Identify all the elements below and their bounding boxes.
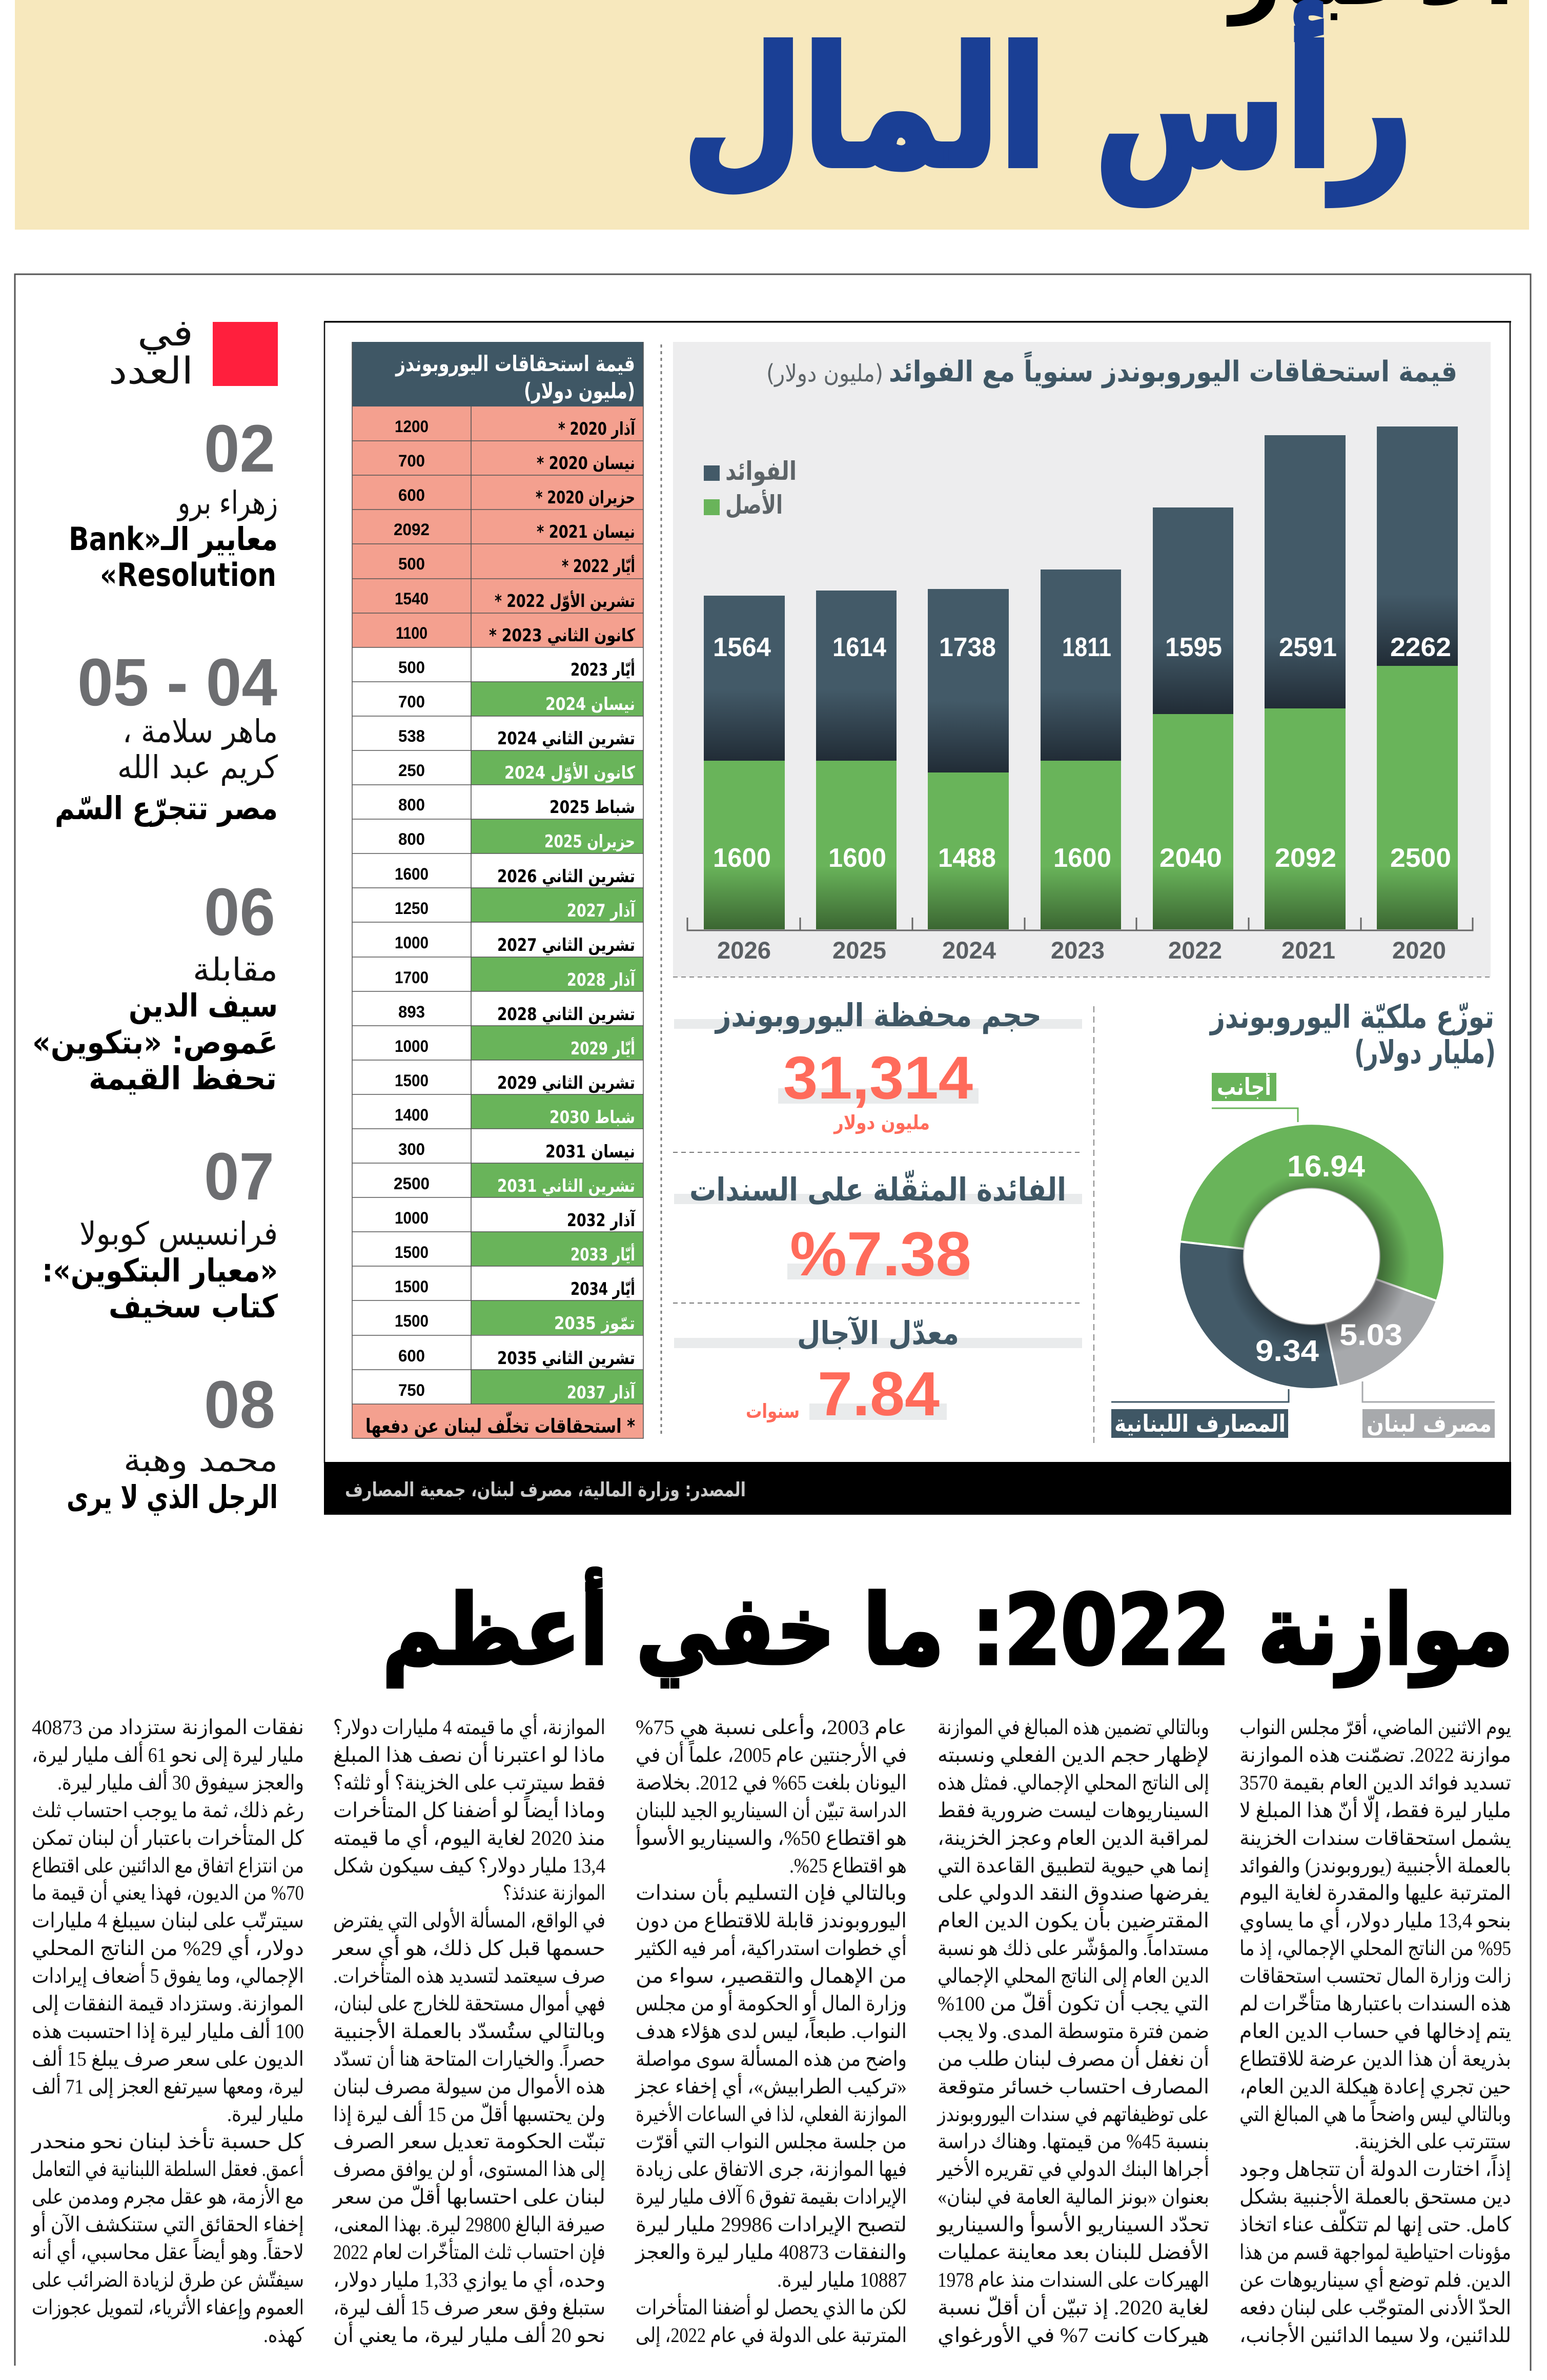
article column 5: %70 من الديون، فهذا يعني أن قيمة ما <box>32 1879 304 1905</box>
table amounts: 1500 <box>395 1277 429 1296</box>
table amounts: 500 <box>398 555 425 573</box>
sidebar item 06: عَموص: «بتكوين» <box>32 1024 278 1062</box>
table dates: تشرين الأوّل 2022 * <box>495 590 635 612</box>
article column 1: تسديد فوائد الدين العام بقيمة 3570 <box>1239 1771 1511 1795</box>
table amounts: 800 <box>398 796 425 814</box>
table dates: تشرين الثاني 2035 <box>497 1348 635 1369</box>
article column 1: الحدّ الأدنى المتوجّب على لبنان دفعه <box>1239 2294 1511 2320</box>
year labels: 2020 <box>1392 937 1446 964</box>
article column 4: حسمها قبل كل ذلك، هو أي سعر <box>332 1935 605 1960</box>
article column 3: من جلسة مجلس النواب التي أقرّت <box>636 2128 907 2153</box>
article column 2: وبالتالي تضمين هذه المبالغ في الموازنة <box>938 1716 1209 1739</box>
bar values: 1595 <box>1165 633 1222 662</box>
article column 1: بنحو 13,4 مليار دولار، أي ما يساوي <box>1239 1907 1511 1933</box>
article column 3: وزارة المال أو الحكومة أو من مجلس <box>636 1990 907 2016</box>
article column 4: لبنان على احتسابها أقلّ من سعر <box>332 2183 605 2209</box>
article column 1: زالت وزارة المال تحتسب استحقاقات <box>1239 1964 1511 1988</box>
table dates: تشرين الثاني 2028 <box>497 1004 635 1025</box>
donut title: (مليار دولار) <box>1354 1033 1496 1071</box>
year labels: 2021 <box>1281 937 1335 964</box>
article column 5 <box>31 1716 304 2347</box>
article column 3: الموازنة الفعلي، لذا في الساعات الأخيرة <box>636 2101 907 2126</box>
sidebar: in this issue <box>32 311 278 1516</box>
article column 4 <box>332 1714 605 2347</box>
article column 4: ماذا لو اعتبرنا أن نصف هذا المبلغ <box>333 1741 605 1767</box>
masthead band <box>15 0 1529 230</box>
bar values <box>713 633 1451 873</box>
stat: portfolio size <box>674 996 1082 1134</box>
label: Banque du Liban <box>1362 1381 1495 1438</box>
article column 4: الموازنة، أي ما قيمته 4 مليارات دولار؟ <box>333 1714 605 1739</box>
table footnote <box>352 1404 643 1438</box>
article column 4: الموازنة عندئذ؟ <box>503 1881 605 1905</box>
table dates: آذار 2037 <box>567 1381 636 1403</box>
chart title <box>766 351 1457 389</box>
article column 2: لمراقبة الدين العام وعجز الخزينة، <box>938 1826 1209 1850</box>
donut segments <box>1179 1124 1444 1389</box>
article column 5: مليار ليرة. <box>227 2103 304 2126</box>
table dates: كانون الثاني 2023 * <box>489 625 635 646</box>
article column 3: وبالتالي فإن التسليم بأن سندات <box>636 1879 907 1905</box>
table dates: أيّار 2029 <box>571 1037 635 1059</box>
year labels: 2024 <box>942 937 996 964</box>
year labels: 2022 <box>1168 937 1222 964</box>
sidebar heading <box>109 311 193 392</box>
article column 5: الإجمالي، وما يفوق 5 أضعاف إيرادات <box>32 1962 304 1988</box>
table header: قيمة استحقاقات اليوروبوندز <box>395 351 635 377</box>
article column 1: دين مستحق بالعملة الأجنبية بشكل <box>1239 2184 1511 2209</box>
article column 3: في الأرجنتين عام 2005، علماً أن في <box>636 1740 907 1767</box>
article column 2: هيركات كانت 7% في الأورغواي <box>938 2322 1209 2347</box>
article column 2: لغاية 2020. إذ تبيّن أن أقلّ نسبة <box>938 2294 1209 2320</box>
label: foreigners: أجانب <box>1217 1071 1271 1101</box>
article column 2: لإظهار حجم الدين الفعلي ونسبته <box>938 1743 1209 1767</box>
article column 5: سيفتّش عن طرق لزيادة الضرائب على <box>32 2268 304 2292</box>
sidebar item 02: 02 <box>204 411 275 486</box>
article column 2: إلى الناتج المحلي الإجمالي. فمثل هذه <box>938 1771 1209 1795</box>
bar values: 1600 <box>828 843 886 873</box>
table amounts: 600 <box>398 486 425 504</box>
article column 5: دولار، أي 29% من الناتج المحلي <box>32 1935 304 1960</box>
article column 5: ليرة، ومعها سيرتفع العجز إلى 71 ألف <box>32 2073 304 2099</box>
table amounts: 538 <box>398 727 425 745</box>
article column 3: عام 2003، وأعلى نسبة هي 75% <box>636 1714 907 1739</box>
article column 1 <box>1239 1714 1512 2347</box>
article column 5: إخفاء الحقائق التي ستنكشف الآن أو <box>31 2211 304 2236</box>
bar values: 2500 <box>1390 843 1451 873</box>
table dates: آذار 2028 <box>567 969 636 990</box>
article column 4: تبنّت الحكومة تعديل سعر الصرف <box>333 2130 605 2153</box>
table amounts: 500 <box>398 658 425 677</box>
stat: average maturity: سنوات <box>746 1400 800 1422</box>
sidebar item 06: مقابلة <box>193 951 278 988</box>
chart title: (مليون دولار) <box>766 359 883 388</box>
table header <box>352 342 643 406</box>
article column 4: نحو 20 ألف مليار ليرة، ما يعني أن <box>333 2322 605 2347</box>
sidebar item 02 <box>69 411 278 594</box>
sidebar item 04-05: 05 - 04 <box>77 644 277 720</box>
sidebar item 07: 07 <box>204 1138 274 1214</box>
article column 2 <box>937 1716 1209 2347</box>
article column 3: لتصبح الإيرادات 29986 مليار ليرة <box>636 2213 907 2236</box>
table amounts: 1000 <box>395 1037 429 1055</box>
table amounts: 1250 <box>395 899 429 918</box>
sidebar item 04-05 <box>55 644 278 827</box>
sidebar heading: في <box>137 311 193 355</box>
table amounts: 1500 <box>395 1071 429 1090</box>
sidebar item 02: معايير الـ«Bank <box>69 520 278 558</box>
table amounts: 1600 <box>395 865 429 883</box>
table dates: حزيران 2020 * <box>536 487 635 508</box>
bar chart panel <box>673 342 1491 977</box>
article column 1: هذه السندات باعتبارها متأخّرات لم <box>1239 1989 1511 2016</box>
table amounts: 800 <box>398 830 425 848</box>
article column 5: الديون على سعر صرف يبلغ 15 ألف <box>32 2045 304 2071</box>
table amounts: 1500 <box>395 1243 429 1262</box>
article column 3: فيها الموازنة، جرى الاتفاق على زيادة <box>636 2158 907 2181</box>
table dates <box>489 418 636 1403</box>
label: Lebanese banks <box>1111 1389 1289 1438</box>
chart legend: الأصل <box>725 489 783 520</box>
article column 3: النواب. طبعاً، ليس لدى هؤلاء هدف <box>636 2016 907 2043</box>
sidebar item 04-05: مصر تتجرّع السّم <box>55 789 278 827</box>
article column 5: سيترتّب على لبنان سيبلغ 4 مليارات <box>32 1909 304 1933</box>
article column 1: بالعملة الأجنبية (يوروبوندز) والفوائد <box>1239 1853 1511 1878</box>
article column 2: بنسبة 45% من قيمتها. وهناك دراسة <box>938 2130 1209 2153</box>
table dates: نيسان 2020 * <box>537 453 635 474</box>
article column 1: يتم إدخالها في حساب الدين العام <box>1239 2020 1511 2043</box>
table amounts: 2500 <box>394 1174 430 1193</box>
chart axis <box>687 918 1473 930</box>
article column 5: نفقات الموازنة ستزداد من 40873 <box>32 1716 304 1739</box>
stat: portfolio size: مليون دولار <box>833 1111 930 1134</box>
article column 2: تحدّد السيناريو الأسوأ والسيناريو <box>937 2211 1209 2236</box>
year labels: 2025 <box>832 937 886 964</box>
stat: portfolio size: 31,314 <box>783 1044 973 1112</box>
table amounts: 1100 <box>396 624 428 642</box>
table dates: آذار 2027 <box>567 900 636 921</box>
infographic box <box>324 321 1511 1515</box>
table dates: آذار 2020 * <box>558 418 636 439</box>
donut values: 16.94 <box>1287 1150 1365 1183</box>
bar values: 1811 <box>1062 633 1111 662</box>
table dates: حزيران 2025 <box>544 831 635 852</box>
sidebar item 04-05: كريم عبد الله <box>117 748 278 786</box>
table amounts: 1000 <box>395 933 429 952</box>
table dates: أيّار 2033 <box>571 1243 635 1265</box>
article column 2: إنما هي حيوية لتطبيق القاعدة التي <box>938 1854 1209 1878</box>
donut title <box>1209 998 1496 1071</box>
article column 1: يشمل استحقاقات سندات الخزينة <box>1239 1826 1511 1850</box>
sidebar item 07: كتاب سخيف <box>109 1288 278 1325</box>
article column 4: ستبلغ وفق سعر صرف 15 ألف ليرة، <box>333 2294 605 2320</box>
article column 1: يوم الاثنين الماضي، أقرّ مجلس النواب <box>1239 1714 1511 1739</box>
bar values: 1738 <box>939 633 996 662</box>
table amounts: 1540 <box>395 589 429 608</box>
article column 5: كل المتأخرات باعتبار أن لبنان تمكن <box>32 1824 304 1850</box>
table dates: أيّار 2034 <box>571 1277 635 1299</box>
article column 4: هذه الأموال من سيولة مصرف لبنان <box>333 2073 605 2099</box>
article column 4: فإن احتساب ثلث المتأخّرات لعام 2022 <box>333 2238 605 2264</box>
table amounts: 600 <box>398 1347 425 1365</box>
table amounts: 1700 <box>395 968 429 987</box>
stat: weighted interest: الفائدة المثقّلة على السندات <box>689 1170 1066 1208</box>
article column 1: الدين. فلم توضع أي سيناريوهات عن <box>1239 2266 1511 2292</box>
source bar <box>324 1462 1511 1515</box>
article column 5: كهذه. <box>263 2324 304 2347</box>
article column 5: مليار ليرة إلى نحو 61 ألف مليار ليرة، <box>32 1741 304 1767</box>
sidebar item 07 <box>42 1138 278 1325</box>
article column 2: بعنوان «بونز المالية العامة في لبنان» <box>938 2185 1209 2209</box>
table header: (مليون دولار) <box>524 378 635 404</box>
article column 3: أي خطوات استدراكية، أمر فيه الكثير <box>635 1935 907 1960</box>
bar values: 2092 <box>1275 843 1336 873</box>
article column 1: إذاً، اختارت الدولة أن تتجاهل وجود <box>1239 2154 1511 2181</box>
sidebar item 02: Resolution» <box>100 556 276 594</box>
table dates: شباط 2025 <box>549 797 635 818</box>
article column 1: المترتبة عليها والمقدرة لغاية اليوم <box>1239 1881 1511 1905</box>
article column 3: من الإهمال والتقصير، سواء من <box>636 1964 907 1988</box>
article column 5: أعمق. فعقل السلطة اللبنانية في التعامل <box>32 2155 304 2181</box>
article column 2: السيناريوهات ليست ضرورية فقط <box>938 1799 1209 1822</box>
sidebar item 07: «معيار البتكوين»: <box>42 1252 278 1289</box>
donut values <box>1255 1150 1402 1368</box>
table dates: شباط 2030 <box>549 1107 635 1128</box>
article column 5: مع الأزمة، هو عقل مجرم ومدمن على <box>32 2184 304 2209</box>
table dates: تشرين الثاني 2027 <box>497 935 635 955</box>
article column 1: %95 من الناتج المحلي الإجمالي، إذ ما <box>1239 1937 1511 1960</box>
table dates: تمّوز 2035 <box>554 1313 635 1334</box>
table amounts: 300 <box>398 1140 425 1158</box>
article column 1: ستترتب على الخزينة. <box>1355 2130 1511 2153</box>
table dates: نيسان 2031 <box>545 1142 635 1162</box>
article column 2: ضمن فترة متوسطة المدى. ولا يجب <box>938 2020 1209 2043</box>
table dates: تشرين الثاني 2029 <box>497 1073 635 1093</box>
article column 4: صيرفة البالغ 29800 ليرة. بهذا المعنى، <box>333 2213 605 2236</box>
bar values: 2040 <box>1159 843 1222 873</box>
article column 5: من انتزاع اتفاق مع الدائنين على اقتطاع <box>32 1854 304 1878</box>
stacked bars <box>704 426 1458 929</box>
article column 2: التي يجب أن تكون أقلّ من 100% <box>938 1990 1209 2016</box>
article column 4: في الواقع، المسألة الأولى التي يفترض <box>333 1906 605 1933</box>
article column 4: فقط سيترتب على الخزينة؟ أو ثلثه؟ <box>333 1769 605 1795</box>
table amounts: 750 <box>398 1381 425 1399</box>
article column 4: وماذا أيضاً لو أضفنا كل المتأخرات <box>333 1795 605 1822</box>
article column 3: لكن ما الذي يحصل لو أضفنا المتأخرات <box>636 2293 907 2320</box>
stat: weighted interest: %7.38 <box>790 1219 971 1289</box>
chart title: قيمة استحقاقات اليوروبوندز سنوياً مع الفوائد <box>889 351 1457 389</box>
article column 2: أن نغفل أن مصرف لبنان طلب من <box>938 2045 1209 2071</box>
article column 1: كامل. حتى إنها لم تتكلّف عناء اتخاذ <box>1239 2209 1512 2236</box>
table amounts: 250 <box>398 761 425 780</box>
bar values: 2591 <box>1279 633 1337 662</box>
bar values: 1488 <box>938 843 996 873</box>
donut chart: eurobond ownership <box>1111 998 1496 1438</box>
article column 3: هو اقتطاع 50%، والسيناريو الأسوأ <box>636 1824 907 1850</box>
article column 5: الموازنة. وستزداد قيمة النفقات إلى <box>32 1992 304 2016</box>
article column 3: الدراسة تبيّن أن السيناريو الجيد للبنان <box>636 1797 907 1822</box>
article column 1: للدائنين، ولا سيما الدائنين الأجانب، <box>1239 2322 1511 2347</box>
bar values: 2262 <box>1390 633 1451 662</box>
chart legend: الفوائد <box>725 456 797 486</box>
table amounts: 700 <box>398 452 425 470</box>
stat: portfolio size: حجم محفظة اليوروبوندز <box>714 996 1042 1034</box>
article column 3: اليونان بلغت 65% في 2012. بخلاصة <box>636 1771 907 1795</box>
sidebar item 02: زهراء برو <box>177 484 278 521</box>
stat: average maturity: معدّل الآجال <box>797 1314 959 1352</box>
bar values: 1564 <box>713 633 771 662</box>
sidebar item 06: تحفظ القيمة <box>89 1060 277 1097</box>
table amounts: 1400 <box>395 1106 429 1124</box>
sidebar item 08 <box>67 1367 278 1516</box>
label: foreigners <box>1212 1071 1298 1122</box>
sidebar item 08: الرجل الذي لا يرى <box>67 1478 278 1516</box>
article headline: موازنة 2022: ما خفي أعظم <box>382 1568 1513 1687</box>
table dates: أيّار 2023 <box>571 658 635 680</box>
table amounts: 893 <box>398 1003 425 1021</box>
year labels <box>717 937 1446 964</box>
article column 2: أجراها البنك الدولي في تقريره الأخير <box>937 2155 1209 2181</box>
year labels: 2023 <box>1051 937 1105 964</box>
sidebar item 08: 08 <box>204 1367 275 1442</box>
donut values: 5.03 <box>1339 1318 1402 1352</box>
year labels: 2026 <box>717 937 771 964</box>
article column 5: كل حسبة تأخذ لبنان نحو منحدر <box>31 2127 304 2153</box>
article column 3: الإيرادات بقيمة تفوق 6 آلاف مليار ليرة <box>636 2184 907 2209</box>
bar values: 1600 <box>713 843 771 873</box>
article column 2: الدين العام إلى الناتج المحلي الإجمالي <box>938 1964 1209 1988</box>
table amounts: 1200 <box>395 417 429 436</box>
stat: weighted interest <box>674 1170 1082 1289</box>
article column 3: المترتبة على الدولة في عام 2022، إلى <box>636 2324 907 2347</box>
sidebar item 07: فرانسيس كوبولا <box>79 1215 278 1252</box>
article column 5: رغم ذلك، ثمة ما يوجب احتساب ثلث <box>32 1799 304 1822</box>
table: eurobond maturities <box>352 342 643 1438</box>
article column 1: مليار ليرة فقط، إلّا أنّ هذا المبلغ لا <box>1239 1795 1511 1822</box>
article column 3: «تركيب الطرابيش»، أي إخفاء عجز <box>635 2073 907 2099</box>
article column 4: وبالتالي ستُسدّد بالعملة الأجنبية <box>333 2018 605 2043</box>
table amounts: 1000 <box>395 1209 429 1227</box>
article column 4: ولن يحتسبها أقلّ من 15 ألف ليرة إذا <box>333 2101 605 2126</box>
article column 5: العموم وإعفاء الأثرياء، لتمويل عجوزات <box>32 2294 304 2320</box>
sidebar item 06 <box>32 874 278 1097</box>
stat: average maturity <box>674 1314 1082 1429</box>
bar values: 1600 <box>1053 843 1111 873</box>
sidebar heading: العدد <box>109 349 193 392</box>
table dates: نيسان 2024 <box>545 694 635 715</box>
table dates: آذار 2032 <box>567 1209 636 1231</box>
sidebar item 06: سيف الدين <box>129 987 278 1024</box>
table amounts <box>394 417 430 1399</box>
article column 1: موازنة 2022. تضمّنت هذه الموازنة <box>1239 1743 1511 1767</box>
article column 4: صرف سيعتمد لتسديد هذه المتأخرات. <box>333 1962 605 1988</box>
bar values: 1614 <box>832 633 886 662</box>
article column 3: هو اقتطاع 25%. <box>789 1854 907 1878</box>
stat: average maturity: 7.84 <box>818 1359 940 1429</box>
article column 4: فهي أموال مستحقة للخارج على لبنان، <box>333 1990 605 2016</box>
label: Banque du Liban: مصرف لبنان <box>1367 1410 1492 1437</box>
article column 5: والعجز سيفوق 30 ألف مليار ليرة. <box>57 1769 304 1795</box>
table dates: نيسان 2021 * <box>537 522 635 542</box>
article column 2: الهيركات على السندات منذ عام 1978 <box>938 2268 1209 2292</box>
article column 3: واضح من هذه المسألة سوى مواصلة <box>636 2045 907 2071</box>
sidebar item 08: محمد وهبة <box>124 1441 278 1479</box>
table footnote: * استحقاقات تخلّف لبنان عن دفعها <box>365 1411 635 1437</box>
table amounts: 1500 <box>395 1312 429 1330</box>
article column 3: اليوروبوندز قابلة للاقتطاع من دون <box>636 1909 907 1933</box>
article column 2: يفرضها صندوق النقد الدولي على <box>938 1881 1209 1905</box>
table dates: أيّار 2022 * <box>562 555 635 577</box>
sidebar item 04-05: ماهر سلامة ، <box>123 713 278 750</box>
label: Lebanese banks: المصارف اللبنانية <box>1114 1410 1286 1437</box>
article column 1: بذريعة أن هذا الدين عرضة للاقتطاع <box>1239 2045 1511 2071</box>
article column 2: مستداماً. والمؤشّر على ذلك هو نسبة <box>938 1933 1209 1960</box>
table amounts: 700 <box>398 693 425 711</box>
donut values: 9.34 <box>1255 1334 1319 1368</box>
article column 1: حين تجري إعادة هيكلة الدين العام، <box>1239 2075 1511 2099</box>
masthead title: رأس المال <box>683 1 1413 206</box>
article column 5: 100 ألف مليار ليرة إذا احتسبت هذه <box>32 2018 304 2043</box>
article column 2: الأفضل للبنان بعد معاينة عمليات <box>938 2239 1209 2264</box>
article column 2: المصارف احتساب خسائر متوقعة <box>938 2075 1209 2099</box>
article column 3: 10887 مليار ليرة. <box>777 2268 907 2292</box>
source bar: المصدر: وزارة المالية، مصرف لبنان، جمعية المصارف <box>345 1478 746 1501</box>
article column 2: على توظيفاتهم في سندات اليوروبوندز <box>937 2103 1209 2126</box>
article column 4: 13,4 مليار دولار؟ كيف سيكون شكل <box>333 1854 605 1878</box>
article column 4: حصراً. والخيارات المتاحة هنا أن تسدّد <box>333 2044 605 2071</box>
chart legend <box>704 456 797 520</box>
table amounts: 2092 <box>394 520 430 539</box>
article column 4: وحده، أي ما يوازي 1,33 مليار دولار، <box>333 2266 605 2292</box>
article column 3 <box>635 1714 907 2347</box>
sidebar item 06: 06 <box>204 874 275 949</box>
article column 4: منذ 2020 لغاية اليوم، أي ما قيمته <box>333 1824 605 1850</box>
red square <box>213 322 278 386</box>
table dates: تشرين الثاني 2026 <box>497 866 635 887</box>
table dates: كانون الأوّل 2024 <box>504 762 635 783</box>
article column 5: لاحقاً. وهو أيضاً عقل محاسبي، أي أنه <box>32 2237 304 2264</box>
table dates: تشرين الثاني 2024 <box>497 728 635 749</box>
article column 4: إلى هذا المستوى، أو لن يوافق مصرف <box>333 2155 605 2181</box>
table dates: تشرين الثاني 2031 <box>497 1176 635 1196</box>
article column 2: المقترضين بأن يكون الدين العام <box>938 1906 1209 1933</box>
article column 3: والنفقات 40873 مليار ليرة والعجز <box>635 2241 907 2264</box>
